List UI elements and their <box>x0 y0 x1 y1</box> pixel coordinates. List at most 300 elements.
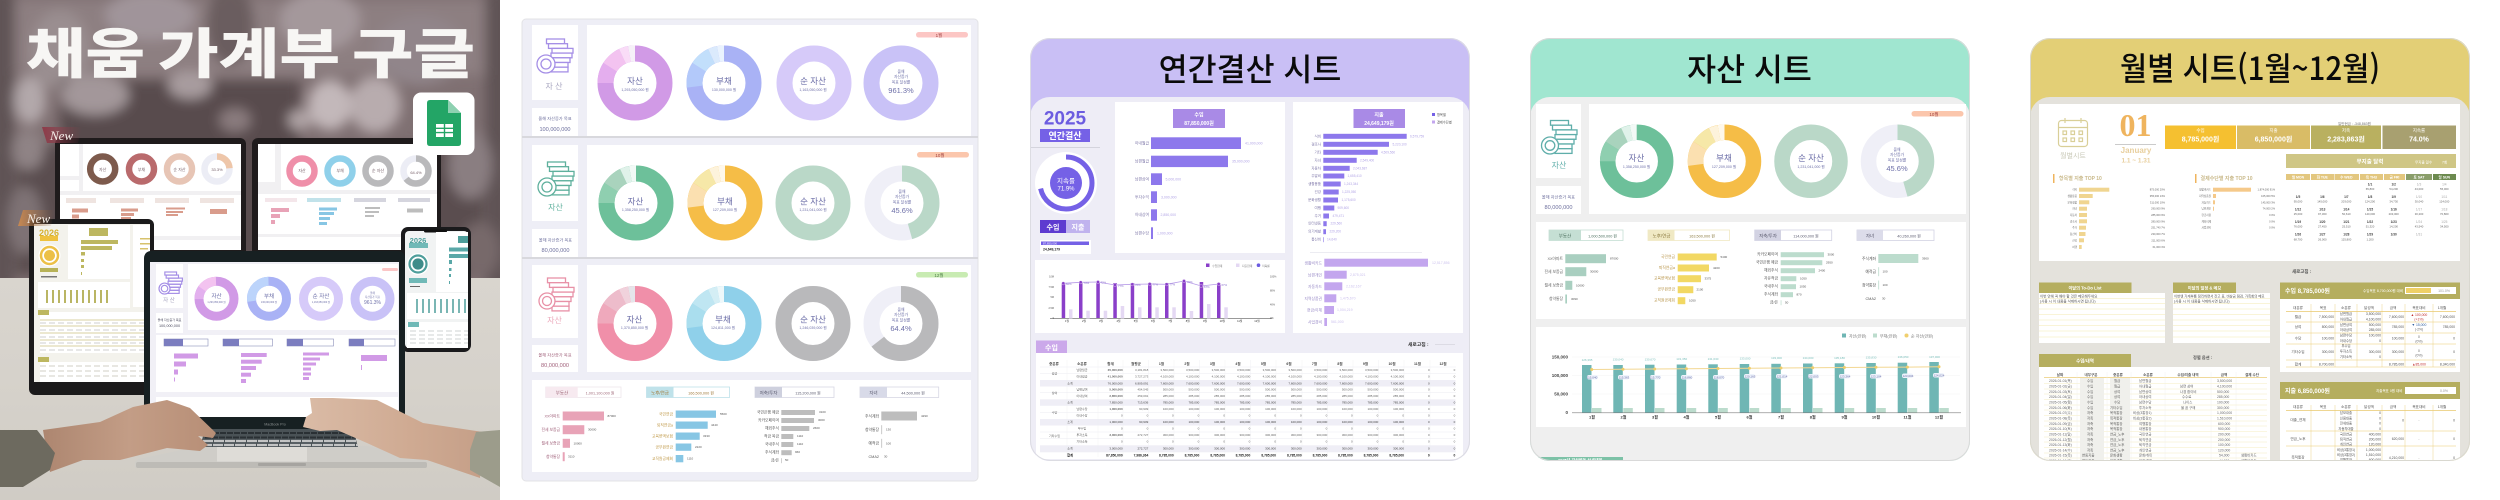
table: monthly income: 7,600,000 <box>1160 382 1174 386</box>
table: transactions: 연금_노후 <box>2110 448 2124 452</box>
calendar: no-spend days: 1/15 <box>2367 208 2373 212</box>
calendar: no-spend days: 1/14 <box>2343 208 2350 212</box>
combo chart: monthly income and expense: 80% <box>1270 290 1276 292</box>
table: transactions: 2026-01-07(수) <box>2049 410 2072 415</box>
table: monthly income: 100,000 <box>1188 407 1200 411</box>
bar charts: asset categories: 44,500,000 원 <box>901 390 925 396</box>
table: monthly income: 500,000 <box>1163 388 1174 392</box>
table: monthly income: 0 <box>1198 440 1200 444</box>
table: expense summary <box>2280 382 2460 465</box>
table: expense summary: 지출목표 0원 대비 <box>2376 388 2402 393</box>
table: monthly income: 272,727 <box>1137 446 1149 450</box>
table: expense summary: 국민연금 <box>2340 432 2352 436</box>
table: monthly income: 785,000 <box>1291 400 1302 404</box>
panel: product hero photo <box>0 0 510 500</box>
combo chart: assets by month: 118,070 <box>1714 375 1725 379</box>
combo chart: monthly income and expense: 77% <box>1118 284 1124 288</box>
bar charts: asset categories: 퇴직연금a <box>657 422 674 428</box>
icon: Google Sheets logo <box>413 92 474 155</box>
table: monthly income: 100,000 <box>1342 420 1353 424</box>
table: monthly income: 0 <box>1121 426 1123 430</box>
monthly summary card: 일반현금 : -348,863원 <box>2338 121 2371 126</box>
combo chart: assets by month: 135,830 <box>1866 356 1877 360</box>
chart: goal donut: 961.3% <box>888 86 914 95</box>
table: monthly income: 소계 <box>1067 380 1073 386</box>
chart: goal donut grey: 자산증가 <box>894 312 908 317</box>
table: monthly income: 8,785,000 <box>1261 454 1276 458</box>
table: monthly income: 0 <box>1300 426 1302 430</box>
combo chart: monthly income and expense: 지출합계 <box>1242 264 1253 268</box>
combo chart: monthly income and expense: 4월 <box>1117 319 1121 323</box>
chart: assets donut <box>606 54 664 112</box>
table: monthly income: 285,000 <box>1393 394 1404 398</box>
table: monthly income: 0 <box>1223 440 1225 444</box>
table: transactions: 2026-01-12(월) <box>2049 437 2072 442</box>
table: monthly income: 500,000 <box>1342 388 1353 392</box>
device: laptop: 1,163,050,000 원 <box>312 300 330 304</box>
table: monthly income: 500,000 <box>1188 388 1200 392</box>
combo chart: monthly income and expense: 2.5M <box>1048 307 1054 310</box>
table: monthly income: 285,000 <box>1188 394 1200 398</box>
table: monthly income: 300,000 <box>1214 446 1225 450</box>
bar charts: asset categories: 3900 <box>1922 256 1929 260</box>
combo chart: monthly income and expense: 100% <box>1270 276 1277 278</box>
calendar: no-spend days: 1/4 <box>2442 182 2447 186</box>
bar charts: asset categories: 100 <box>886 441 891 445</box>
bar chart: expense: 561,000 <box>1331 320 1344 324</box>
bar charts: asset categories: XX아파트 <box>544 414 561 418</box>
combo chart: assets by month: 순 자산(만원) <box>1911 332 1934 338</box>
table: transactions: 아내월급 <box>2139 384 2151 388</box>
donuts row: 자산 <box>1629 153 1644 163</box>
bar chart: income: 3,000,000 <box>1161 196 1177 200</box>
table: income summary: 300,000 <box>2322 350 2334 354</box>
list: payment top 10: 0 0% <box>2269 219 2276 223</box>
donuts row: 10월 <box>1929 111 1939 118</box>
table: monthly income: 785,000 <box>1214 400 1225 404</box>
bar charts: asset categories: 1050 <box>1800 285 1807 289</box>
table: monthly income: 3,500,000 <box>1212 368 1225 372</box>
table: monthly income: 285,000 <box>1291 394 1302 398</box>
combo chart: monthly income and expense: 7.5M <box>1048 286 1054 289</box>
calendar: no-spend days: 25,000 <box>2294 212 2303 216</box>
calendar: no-spend days: 목 THU <box>2366 174 2378 180</box>
device: laptop: 올해 자산증가 목표 <box>158 317 182 322</box>
chart: goal donut green: 자산증가 <box>895 194 909 199</box>
device: laptop: 자산 <box>211 292 222 300</box>
table: transactions: 수당 <box>2114 400 2120 404</box>
bar charts: asset categories: 5400 <box>1720 255 1728 259</box>
table: monthly income: 7,986,364 <box>1134 454 1148 458</box>
table: monthly income: 0 <box>1172 440 1174 444</box>
table: monthly income: 투자소득 <box>1076 432 1088 437</box>
combo chart: assets by month: 137,000 <box>1929 355 1940 359</box>
table: transactions: 생활비카드 <box>2241 458 2257 463</box>
table: income summary: 300,000 <box>2392 350 2404 354</box>
bar chart: income: 투자수익 <box>1135 194 1149 200</box>
table: expense summary: 목표대비 <box>2412 404 2426 409</box>
table: monthly income: 0 <box>1454 440 1456 444</box>
table: monthly income: 0 <box>1377 414 1379 418</box>
bar charts: asset categories: 저축/투자 <box>760 390 778 396</box>
bar charts: asset categories: 노후/연금 <box>651 390 669 396</box>
table: expense summary: 대출_연체 <box>2290 417 2306 422</box>
bar chart: expense: 의기계발 <box>1308 229 1322 234</box>
bar charts: asset categories: 2600 <box>813 426 820 430</box>
table heading <box>1036 340 1455 353</box>
table: transactions: 2026-01-06(화) <box>2049 405 2072 410</box>
combo chart: monthly income and expense: 7월 <box>1168 319 1173 323</box>
table: monthly income: 0 <box>1147 440 1149 444</box>
chart: net worth donut <box>784 54 844 112</box>
table: transactions: 여행통장 <box>2139 421 2151 426</box>
monthly summary card: 수입 <box>2196 127 2205 134</box>
panel: asset sheet <box>1530 38 1970 477</box>
table: monthly income: 1,000,000 <box>1109 407 1123 411</box>
bar charts: asset categories: 자녀 <box>869 390 878 396</box>
table: monthly income: 785,000 <box>1239 400 1251 404</box>
bar chart: expense: 기타 <box>1315 150 1322 154</box>
combo chart: assets by month: 9월 <box>1842 414 1848 420</box>
table: transactions: 금액 <box>2221 372 2227 377</box>
combo chart: assets by month: 부채(만원) <box>1880 332 1898 338</box>
bar chart: income: 수입 <box>1194 112 1204 118</box>
chart: net worth donut grey <box>784 294 842 353</box>
table: monthly income: 0 <box>1454 433 1456 437</box>
bar chart: expense: 1,475,670 <box>1340 296 1356 300</box>
bar chart: income: 1,000,000 <box>1157 232 1173 236</box>
table: income summary: 0 <box>2418 335 2420 339</box>
device: laptop: 100,000,000 <box>159 324 180 328</box>
bar charts: asset categories: 100 <box>1882 270 1888 274</box>
bar charts: asset categories: 4290 <box>921 414 928 418</box>
table: monthly income: 100,000 <box>1163 420 1174 424</box>
table: expense summary: 퇴직연금 <box>2340 436 2352 442</box>
combo chart: assets by month: 134,000 <box>1803 356 1814 360</box>
bar charts: asset categories: 금/은 <box>1770 301 1779 305</box>
table: transactions: 200,000 <box>2218 432 2230 436</box>
panel: dashboard overview colour themes <box>522 19 978 481</box>
combo chart: monthly income and expense: 수입합계 <box>1212 264 1223 268</box>
calendar: no-spend days: 26,000 <box>2318 238 2327 242</box>
table: monthly income: 300,000 <box>1163 446 1174 450</box>
combo chart: monthly income and expense: 6월 <box>1151 319 1156 323</box>
calendar: no-spend days: 1/21 <box>2343 220 2350 224</box>
chart: assets donut pink: 자산 <box>627 314 642 324</box>
table: monthly income: 300,000 <box>1393 446 1404 450</box>
table: monthly income: 중분류 <box>1049 361 1060 366</box>
bar charts: asset categories: 960 <box>795 450 800 454</box>
table: monthly income: 0 <box>1428 382 1430 386</box>
monthly summary card: 월별시트 <box>2060 151 2086 160</box>
table: transactions: 생활비카드 <box>2241 452 2257 458</box>
left summary: 수입 <box>1047 222 1059 232</box>
bar chart: expense: 주말비 <box>1311 173 1321 178</box>
combo chart: monthly income and expense: 8월 <box>1186 319 1190 323</box>
table: transactions: 54,000 <box>2219 454 2229 458</box>
table: monthly income: 월급 <box>1052 370 1057 376</box>
bar charts: asset categories: 청약통장 <box>546 454 560 459</box>
table: monthly income: 0 <box>1428 407 1430 411</box>
bar charts: asset categories: 3000 <box>818 418 825 422</box>
bar chart: expense: 식비 <box>1315 134 1321 138</box>
row: green theme <box>532 145 973 257</box>
table: monthly income: 0 <box>1223 414 1225 418</box>
chart: net worth donut: 1,163,050,000 원 <box>799 87 827 92</box>
list: category top 10: 311,000 10% <box>2150 200 2166 204</box>
bar chart: expense: 생활용품 <box>1308 181 1322 186</box>
table: monthly income: 300,000 <box>1316 433 1328 437</box>
table: income summary: 3,500,000 <box>2366 312 2381 316</box>
table: monthly income: 41,000,000 <box>1108 374 1123 378</box>
calendar: no-spend days: 55,000 <box>2440 187 2449 191</box>
table: transactions: 저축 <box>2087 410 2093 415</box>
calendar: no-spend days: 1/28 <box>2343 233 2350 237</box>
table: monthly income: 285,000 <box>1239 394 1251 398</box>
bar chart: expense: 5,220,100 <box>1392 142 1407 146</box>
table: expense summary: 1개월 <box>2438 404 2446 409</box>
chart: goal donut green <box>872 174 932 232</box>
list: payment top 10: 계좌이체 <box>2201 219 2212 223</box>
combo chart: monthly income and expense: 1월 <box>1065 319 1070 323</box>
bar charts: asset categories: 30 <box>884 455 888 459</box>
table: transactions: 결제 수단 <box>2245 372 2260 377</box>
bar chart: expense: 자녀 <box>1315 158 1321 162</box>
table: monthly income: 상여 <box>1052 390 1057 395</box>
bar charts: asset categories: 40,260,000 원 <box>1897 234 1921 238</box>
calendar: no-spend days: 43,540 <box>2415 224 2424 228</box>
table: monthly income: 4,100,000 <box>1263 374 1276 378</box>
table: monthly income: 4,100,000 <box>1160 374 1174 378</box>
calendar: no-spend days: 1/2 <box>2391 182 2396 186</box>
bar charts: asset categories: 해외주식 <box>1764 268 1778 273</box>
table: income summary: (+1%) <box>2414 318 2424 322</box>
table: transactions: 국민연금 <box>2139 432 2151 436</box>
combo chart: monthly income and expense: 11월 <box>1237 319 1243 323</box>
table: monthly income: 0 <box>1300 440 1302 444</box>
bar chart: expense: 1,004,219 <box>1337 308 1353 312</box>
table: monthly income: 3,727,273 <box>1135 374 1149 378</box>
list: payment top 10: 105,000 5% <box>2261 194 2276 198</box>
device: laptop <box>135 251 427 468</box>
table: monthly income: 8,785,000 <box>1364 454 1378 458</box>
bar charts: asset categories: 1110 <box>687 456 694 460</box>
bar charts: asset categories: 50 <box>1785 301 1789 305</box>
bar charts: asset categories: 전세 보증금 <box>1544 269 1563 274</box>
table: monthly income: 기타소득 <box>1076 438 1088 444</box>
table: monthly income: 수당 <box>1052 410 1057 414</box>
combo chart: assets by month: 116,860 <box>1682 375 1693 379</box>
calendar: no-spend days: 1/8 <box>2368 195 2372 199</box>
table: income summary: 소분류 <box>2341 305 2352 310</box>
table: monthly income: 8,785,000 <box>1287 454 1302 458</box>
bar charts: asset categories: 전세 보증금 <box>541 427 560 432</box>
table: income summary: 월급 <box>2295 314 2302 319</box>
bar charts: asset categories: 교육변액보험 <box>1654 276 1675 281</box>
table: transactions: 투자소득 <box>2139 405 2151 410</box>
calendar: no-spend days: 무지출 달력 <box>2357 158 2383 166</box>
table: monthly income: 3,181,818 <box>1135 368 1149 372</box>
table: expense summary: 목적통장 <box>2291 454 2305 460</box>
calendar: no-spend days: 1/18 <box>2441 208 2448 212</box>
combo chart: assets by month: 115,040 <box>1587 375 1598 379</box>
bar charts: asset categories: 카카오페이머 <box>758 418 779 422</box>
bar charts: asset categories: 퇴직연금a <box>1659 265 1676 270</box>
bar chart: expense: 229,200 <box>1330 230 1341 234</box>
table: expense summary: - <box>2418 456 2420 460</box>
bar chart: income: 남편상여 <box>1135 176 1149 182</box>
table: monthly income: 300,000 <box>1239 446 1251 450</box>
bar chart: expense: 6,579,759 <box>1410 134 1424 138</box>
bar charts: asset categories: 카카오페이머 <box>1757 252 1778 257</box>
bar chart: income: 남편월급 <box>1135 158 1149 164</box>
bar charts: asset categories: 2220 <box>695 445 702 449</box>
table: transactions: 수입 <box>2087 389 2093 394</box>
table: monthly income: 500,000 <box>1291 388 1302 392</box>
bar chart: expense: 주거 <box>1315 213 1321 218</box>
bar charts: asset categories: 87000 <box>1610 256 1619 260</box>
device: back left monitor: 33.3% <box>211 167 223 172</box>
left summary: 24,649,179 <box>1043 248 1060 252</box>
table: monthly income: 300,000 <box>1188 446 1200 450</box>
device: laptop: 자 산 <box>163 296 175 304</box>
row: pink theme <box>532 265 971 372</box>
table: monthly income: 0 <box>1428 388 1430 392</box>
table: monthly income: 8,785,000 <box>1389 454 1404 458</box>
panel: annual settlement sheet <box>1030 38 1470 477</box>
monthly summary card: 01 <box>2120 107 2152 143</box>
combo chart: monthly income and expense: 76% <box>1135 283 1141 287</box>
table: transactions: 900,000 <box>2218 427 2230 431</box>
device: laptop: 1,293,050,000 원 <box>207 300 226 304</box>
chart: goal donut: 목표 달성률 <box>892 80 911 84</box>
table: monthly income: 7,600,000 <box>1186 382 1200 386</box>
table: monthly income: 0 <box>1351 426 1353 430</box>
right hand and sleeve <box>303 398 500 487</box>
bar charts: asset categories: 국내주식 <box>1764 284 1778 289</box>
table: monthly income: 100,000 <box>1188 420 1200 424</box>
row: purple theme <box>532 25 971 136</box>
table: monthly income: 7,850,000 <box>1109 400 1123 404</box>
bar chart: expense: 1,225,050 <box>1342 190 1356 194</box>
bar chart: expense: 24,649,179원 <box>1364 120 1394 127</box>
calendar: no-spend days: 30,200 <box>2415 212 2424 216</box>
table: monthly income: 8,785,000 <box>1185 454 1199 458</box>
row: green theme: 80,000,000 <box>542 248 570 254</box>
table: income summary: 달성액 <box>2364 305 2374 310</box>
combo chart: monthly income and expense: 67% <box>1204 285 1210 289</box>
calendar: no-spend days: 1/17 <box>2416 208 2422 212</box>
list: category top 10: 230,000 7% <box>2151 232 2166 236</box>
table: transactions: 비상(3통장1) <box>2133 410 2152 415</box>
table: transactions: 남편상여 <box>2139 389 2151 394</box>
table: monthly income: 100,000 <box>1291 407 1302 411</box>
combo chart: assets by month: 7월 <box>1778 414 1784 420</box>
monthly summary card: 지속률 <box>2413 127 2425 134</box>
chart: liabilities donut blue: 124,811,000 원 <box>711 325 735 330</box>
table: monthly income: 0 <box>1249 440 1251 444</box>
list: category top 10: 355,000 13% <box>2150 194 2166 198</box>
left summary: 71.9% <box>1057 186 1075 192</box>
chart: liabilities donut blue: 부채 <box>715 314 731 324</box>
table: monthly income: 713,636 <box>1137 400 1149 404</box>
table: monthly income: 3,500,000 <box>1339 368 1353 372</box>
bar chart: expense: 항목별 <box>1437 112 1446 117</box>
monthly summary card: 8,785,000원 <box>2182 134 2219 144</box>
badge: New ribbon lower <box>18 210 55 226</box>
bar chart: expense: 1,175,600 <box>1342 198 1356 202</box>
calendar: no-spend days: 70,800 <box>2440 212 2449 216</box>
table: transactions: 변동지출 <box>2082 458 2094 463</box>
table: monthly income: 7,600,000 <box>1263 382 1276 386</box>
table: monthly income: 11월 <box>1414 361 1421 366</box>
table: transactions: 기타수입 <box>2110 405 2122 410</box>
title <box>26 27 473 78</box>
table: monthly income: 7월 <box>1312 361 1317 366</box>
table: monthly income: 10월 <box>1388 361 1396 366</box>
device: back right monitor: 64.4% <box>410 170 422 175</box>
calendar: no-spend days <box>2286 154 2456 242</box>
table: monthly income: 1월 <box>1159 361 1164 366</box>
table: expense summary: 신용대출 <box>2340 416 2352 420</box>
table: monthly income: 785,000 <box>1316 400 1328 404</box>
table: monthly income: 4,100,000 <box>1365 374 1379 378</box>
table: monthly income: 아내수당 <box>1076 412 1088 418</box>
calendar: no-spend days: 수 WED <box>2340 174 2353 180</box>
table: transactions: 개인연금 <box>2139 448 2151 452</box>
table: monthly income: 3,500,000 <box>1263 368 1276 372</box>
bar charts: asset categories: 115,200,000 원 <box>795 390 821 396</box>
table: income summary: 부수입 <box>2341 343 2351 348</box>
table: monthly income: 76,000,000 <box>1108 382 1123 386</box>
table: transactions: 1,000,000 <box>2217 411 2232 415</box>
device: back right monitor: 순 자산 <box>372 167 384 173</box>
icon: coins pink <box>539 278 574 311</box>
chart: goal donut grey: 64.4% <box>890 324 912 333</box>
calendar: no-spend days: 50,610 <box>2342 212 2351 216</box>
table: monthly income: 8,785,000 <box>1210 454 1225 458</box>
table: transactions: 2026-01-11(일) <box>2049 432 2071 436</box>
bar chart: expense: 4,509,560 <box>1381 150 1395 154</box>
table: monthly income: 100,000 <box>1214 420 1225 424</box>
combo chart: monthly income and expense: 2월 <box>1082 319 1087 323</box>
table: monthly income: 8월 <box>1337 361 1343 366</box>
table: monthly income: 500,000 <box>1393 388 1404 392</box>
table: monthly income: 0 <box>1454 388 1456 392</box>
combo chart: assets by month: 135,180 <box>1834 356 1845 360</box>
bar charts: asset categories: 1110 <box>797 442 804 446</box>
device: phone <box>401 227 471 352</box>
bar charts: asset categories: 1,001,100,000 원 <box>586 390 615 396</box>
title: 가계부 <box>158 10 340 89</box>
combo chart: monthly income and expense: 5M <box>1051 296 1054 299</box>
table: expense summary: 대분류 <box>2293 404 2304 409</box>
table: monthly income: 9월 <box>1363 361 1368 366</box>
combo chart: monthly income and expense: 67% <box>1222 283 1228 287</box>
calendar: no-spend days: 화 TUE <box>2317 174 2329 180</box>
calendar: no-spend days: 토 SAT <box>2414 174 2425 180</box>
table: monthly income: 300,000 <box>1367 433 1379 437</box>
chart: net worth donut grey: 순 자산 <box>800 314 826 324</box>
bar charts: asset categories: 1050 <box>1800 277 1807 281</box>
heading: asset sheet: 자산 시트 <box>1687 44 1812 90</box>
calendar: no-spend days: 76,000 <box>2294 224 2303 228</box>
table: expense summary: 0 <box>2453 456 2455 460</box>
table: monthly income: 0 <box>1428 394 1430 398</box>
table: transactions: 저축 <box>2087 432 2093 436</box>
table: transactions: 저축 <box>2087 442 2093 447</box>
combo chart: assets by month: 6월 <box>1747 414 1753 420</box>
